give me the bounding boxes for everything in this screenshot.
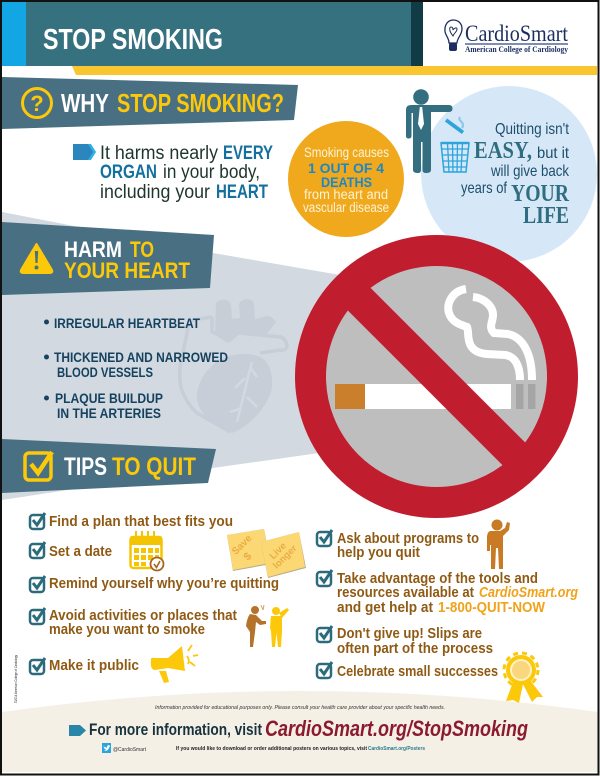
icon: cigarette into trash: [441, 117, 469, 172]
logo: CardioSmart: [445, 20, 569, 54]
callout: 1 out of 4 deaths: DEATHS: [321, 174, 372, 190]
tips: right column: CardioSmart.org: [479, 585, 578, 601]
list: heart harms: IRREGULAR HEARTBEAT: [54, 316, 201, 331]
tips: left column: Find a plan that best fits you: [49, 514, 233, 530]
tips: right column: often part of the process: [337, 641, 493, 657]
tips: right column: [317, 530, 578, 680]
text block: quitting: will give back: [490, 163, 570, 180]
list: heart harms: [44, 316, 228, 421]
text block: quitting: years of: [461, 180, 507, 197]
text block: harms every organ: [73, 143, 273, 203]
icon: calendar: [130, 531, 164, 570]
text block: harms every organ: ORGAN: [100, 162, 157, 183]
footer panel: [2, 691, 598, 772]
tips: left column: Make it public: [49, 658, 139, 674]
twitter handle: [102, 743, 147, 753]
tips: right column: 1-800-QUIT-NOW: [438, 600, 545, 616]
text block: harms every organ: HEART: [216, 182, 268, 203]
tips: right column: Don't give up! Slips are: [337, 626, 482, 642]
sticky notes: longer: [271, 543, 300, 571]
callout: 1 out of 4 deaths: vascular disease: [303, 200, 389, 215]
banner: tips to quit: TIPS: [64, 453, 107, 481]
sticky notes: Save: [230, 533, 255, 557]
banner: harm to your heart: TO: [130, 237, 154, 262]
tips: right column: Celebrate small successes: [337, 664, 498, 680]
banner: tips to quit: [2, 439, 216, 493]
banner: why stop smoking: [2, 77, 298, 129]
call to action: [69, 716, 528, 741]
call to action: CardioSmart.org/StopSmoking: [265, 716, 528, 741]
icon: smoke: [448, 289, 532, 380]
callout: 1 out of 4 deaths: 1 OUT OF 4: [308, 160, 384, 176]
tips: right column: Take advantage of the tools and: [337, 571, 538, 587]
twitter handle: @CardioSmart: [113, 747, 147, 753]
text block: quitting: Quitting isn't: [495, 121, 569, 138]
text block: quitting: LIFE: [523, 203, 569, 229]
download note: If you would like to download or order additional posters on various topics, visit: [176, 746, 367, 752]
vertical copyright note: ©2014 American College of Cardiology: [14, 655, 18, 703]
banner: harm to your heart: [2, 222, 214, 295]
banner: harm to your heart: HARM: [64, 237, 122, 262]
list: heart harms: THICKENED AND NARROWED: [54, 350, 228, 365]
tips: left column: make you want to smoke: [49, 622, 205, 638]
callout: 1 out of 4 deaths: [288, 121, 404, 237]
light blue circle: [421, 86, 597, 262]
text block: quitting: but it: [537, 145, 570, 162]
tips: right column: and get help at: [337, 600, 433, 616]
icon: question mark: [22, 88, 52, 118]
tips: right column: help you quit: [337, 545, 420, 561]
icon: warning triangle: [21, 244, 52, 273]
banner: harm to your heart: YOUR HEART: [64, 258, 190, 283]
tips: left column: [30, 513, 279, 674]
icon: two people smoking: [246, 605, 289, 647]
text block: harms every organ: It harms nearly: [100, 143, 218, 164]
logo: CardioSmart: American College of Cardiology: [465, 45, 568, 54]
text block: harms every organ: in your body,: [163, 162, 260, 183]
logo: CardioSmart: CardioSmart: [465, 21, 569, 46]
banner: why stop smoking: WHY: [61, 88, 109, 118]
text block: harms every organ: including your: [100, 182, 211, 203]
header band: [2, 2, 597, 75]
banner: tips to quit: TO QUIT: [112, 453, 196, 481]
title: STOP SMOKING: [43, 24, 223, 56]
list: heart harms: BLOOD VESSELS: [57, 365, 153, 380]
sticky notes: $: [241, 550, 254, 563]
no smoking sign: [310, 250, 562, 502]
sticky notes: Live: [268, 541, 289, 562]
call to action: For more information, visit: [89, 721, 262, 739]
sticky notes: [227, 529, 306, 578]
tips: right column: Ask about programs to: [337, 531, 479, 547]
icon: award ribbon: [504, 653, 543, 703]
text block: harms every organ: EVERY: [223, 143, 273, 164]
icon: person pointing at trash: [406, 89, 452, 173]
text block: quitting: YOUR: [511, 181, 570, 207]
tips: left column: Avoid activities or places that: [49, 608, 237, 624]
tips: left column: Remind yourself why you’re quitting: [49, 576, 279, 592]
icon: check box: [25, 452, 52, 480]
callout: 1 out of 4 deaths: from heart and: [304, 187, 388, 202]
text block: quitting: [461, 121, 570, 229]
tips: left column: Set a date: [49, 544, 112, 560]
icon: cigarette: [335, 384, 536, 409]
icon: heart outline: [180, 299, 287, 433]
disclaimer: Information provided for educational purposes only. Please consult your health care provider about your specific health needs.: [155, 705, 445, 711]
list: heart harms: IN THE ARTERIES: [57, 406, 161, 421]
text block: quitting: EASY,: [474, 138, 532, 164]
download note: CardioSmart.org/Posters: [368, 746, 425, 752]
icon: question mark: ?: [30, 91, 44, 116]
grey backdrop swoosh: [2, 212, 340, 500]
icon: person thinking: [487, 520, 510, 569]
callout: 1 out of 4 deaths: Smoking causes: [304, 145, 389, 160]
list: heart harms: PLAQUE BUILDUP: [55, 391, 163, 406]
icon: megaphone: [151, 645, 198, 683]
tips: right column: resources available at: [337, 585, 474, 601]
banner: why stop smoking: STOP SMOKING?: [117, 88, 284, 118]
